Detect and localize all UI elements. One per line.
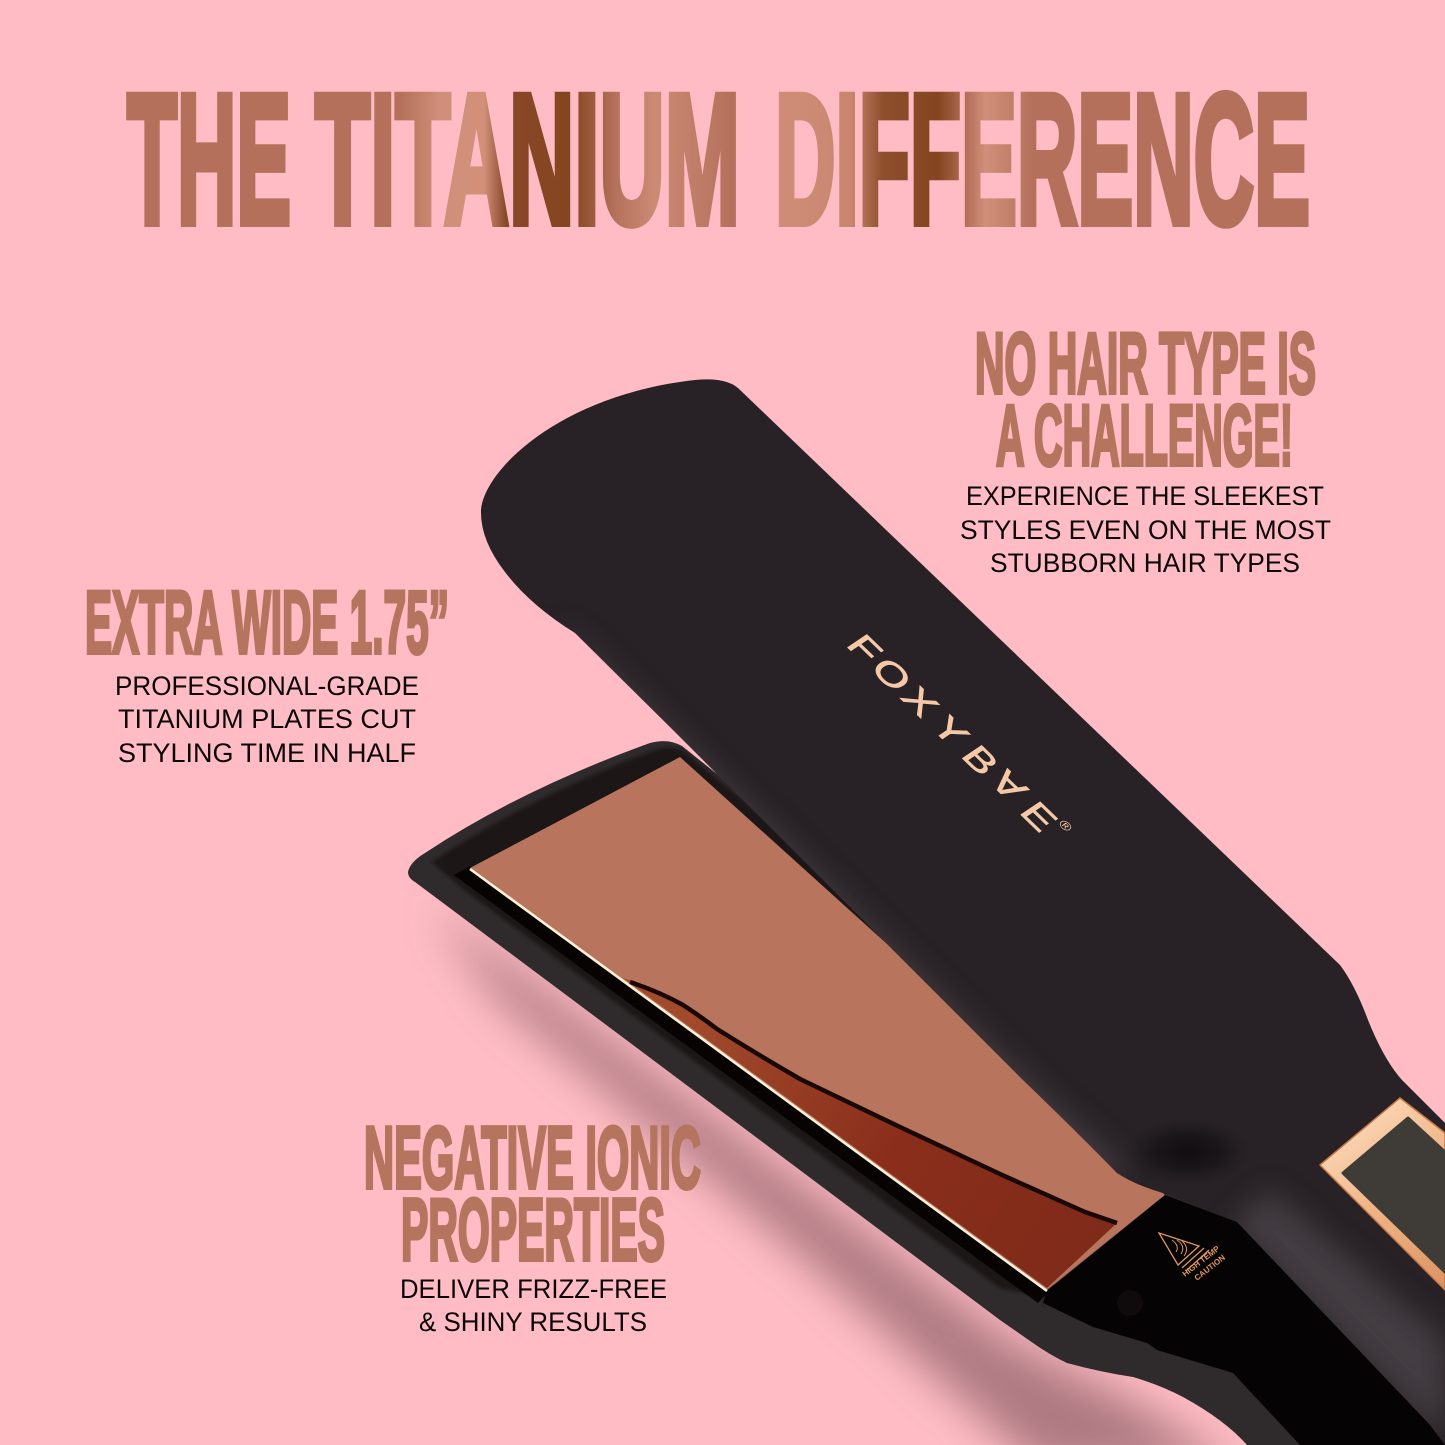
callout: no hair type: STUBBORN HAIR TYPES [990,548,1300,578]
title: TITANIUM [315,57,740,263]
upper arm shading [560,620,1445,1440]
black end panel [1043,1195,1445,1445]
lower arm dark rim [432,748,1060,1300]
registered mark: ® [1055,818,1075,834]
lower arm body [408,741,1445,1445]
callout: no hair type: STYLES EVEN ON THE MOST [960,515,1331,545]
heat warning icon: HIGH TEMP [1181,1244,1222,1279]
plate reflection [623,978,1117,1288]
shadow under iron [430,905,1240,1445]
callout: extra wide: STYLING TIME IN HALF [118,738,416,768]
callout: negative ionic: DELIVER FRIZZ-FREE [400,1274,667,1304]
callout: negative ionic: & SHINY RESULTS [419,1307,647,1337]
display screen [1343,1118,1445,1272]
screw [1117,1290,1143,1316]
brand logo: FOXYBAE [839,627,1067,838]
heat warning icon [1159,1233,1227,1283]
title: THE [127,57,291,263]
text: NEGATIVE IONIC [364,1108,701,1207]
text: EXTRA WIDE 1.75” [85,572,449,672]
display bezel [1320,1098,1445,1290]
titanium plate [470,757,1165,1290]
plate channel [454,866,1050,1303]
callout: negative ionic [364,1108,701,1337]
heat warning icon: CAUTION [1193,1253,1227,1283]
upper arm of straightener [481,379,1445,1445]
callout: extra wide [85,572,449,768]
plate reflection dark line [630,982,1117,1223]
hair straightener illustration [408,741,1445,1445]
callout: negative ionic: PROPERTIES [401,1180,665,1279]
plate bright edge [470,869,1047,1291]
callout: extra wide: PROFESSIONAL-GRADE [115,671,419,701]
callout: no hair type: EXPERIENCE THE SLEEKEST [966,481,1324,511]
callout: no hair type [960,316,1331,578]
callout: extra wide: TITANIUM PLATES CUT [118,704,416,734]
